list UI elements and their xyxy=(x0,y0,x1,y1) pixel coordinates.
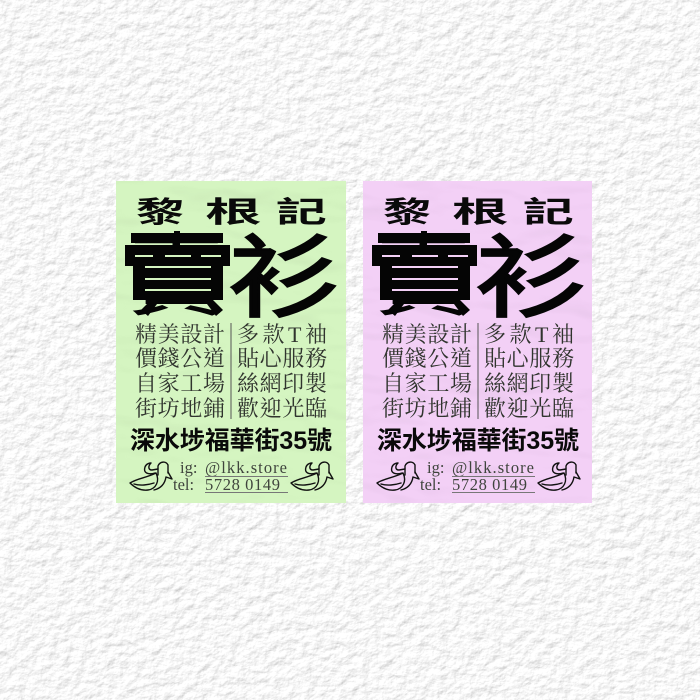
text block: left column: 價錢公道 xyxy=(382,346,472,371)
title: big characters xyxy=(372,228,587,329)
icon: banana right xyxy=(538,462,580,490)
text block: right column: 絲網印製 xyxy=(237,371,327,396)
big character: shirt: 衫 xyxy=(229,229,340,329)
panel: pink poster xyxy=(363,181,592,503)
heading: brand name xyxy=(136,196,327,229)
icon: banana left xyxy=(377,462,419,490)
text block: left column: 精美設計 xyxy=(135,322,225,347)
column divider xyxy=(478,323,479,419)
heading: brand name xyxy=(383,196,574,229)
contact details: tel: xyxy=(173,475,194,494)
text block: left column: 價錢公道 xyxy=(135,346,225,371)
contact details: ig: xyxy=(427,458,444,477)
column divider xyxy=(230,323,232,419)
text block: left column xyxy=(382,322,472,421)
icon: banana left xyxy=(130,462,172,490)
big character: sell: 賣 xyxy=(128,228,225,327)
contact details: tel: xyxy=(420,475,441,494)
text block: left column: 自家工場 xyxy=(135,371,225,396)
contact details: 5728 0149 xyxy=(452,475,527,494)
text block: left column xyxy=(135,322,225,421)
text block: right column: 貼心服務 xyxy=(237,346,327,371)
text block: right column: 歡迎光臨 xyxy=(484,396,574,421)
heading: brand name: 根 xyxy=(205,196,262,228)
text block: left column: 街坊地鋪 xyxy=(135,396,225,421)
text block: right column: 歡迎光臨 xyxy=(237,396,327,421)
address: 深水埗福華街35號 xyxy=(377,427,579,455)
icon: banana right xyxy=(291,462,333,490)
title: big characters xyxy=(125,228,340,329)
poster sheet xyxy=(363,181,592,503)
heading: brand name: 黎 xyxy=(136,197,184,229)
contact details xyxy=(420,458,535,494)
text block: left column: 自家工場 xyxy=(382,371,472,396)
text block: right column xyxy=(484,322,574,421)
text block: right column: 貼心服務 xyxy=(484,346,574,371)
text block: left column: 街坊地鋪 xyxy=(382,396,472,421)
text block: right column: 絲網印製 xyxy=(484,371,574,396)
text block: right column: 多款T袖 xyxy=(237,322,327,347)
panel: green poster xyxy=(116,181,346,503)
poster sheet xyxy=(116,181,346,503)
contact details: @lkk.store xyxy=(205,458,287,477)
contact details xyxy=(173,458,288,494)
big character: sell: 賣 xyxy=(375,228,472,327)
contact details: @lkk.store xyxy=(452,458,534,477)
heading: brand name: 根 xyxy=(452,196,509,228)
heading: brand name: 記 xyxy=(523,196,574,228)
contact details: ig: xyxy=(180,458,197,477)
text block: left column: 精美設計 xyxy=(382,322,472,347)
heading: brand name: 黎 xyxy=(383,197,431,229)
text block: right column xyxy=(237,322,327,421)
text block: right column: 多款T袖 xyxy=(484,322,574,347)
heading: brand name: 記 xyxy=(276,196,327,228)
address: 深水埗福華街35號 xyxy=(130,427,332,455)
contact details: 5728 0149 xyxy=(205,475,280,494)
big character: shirt: 衫 xyxy=(476,229,587,329)
